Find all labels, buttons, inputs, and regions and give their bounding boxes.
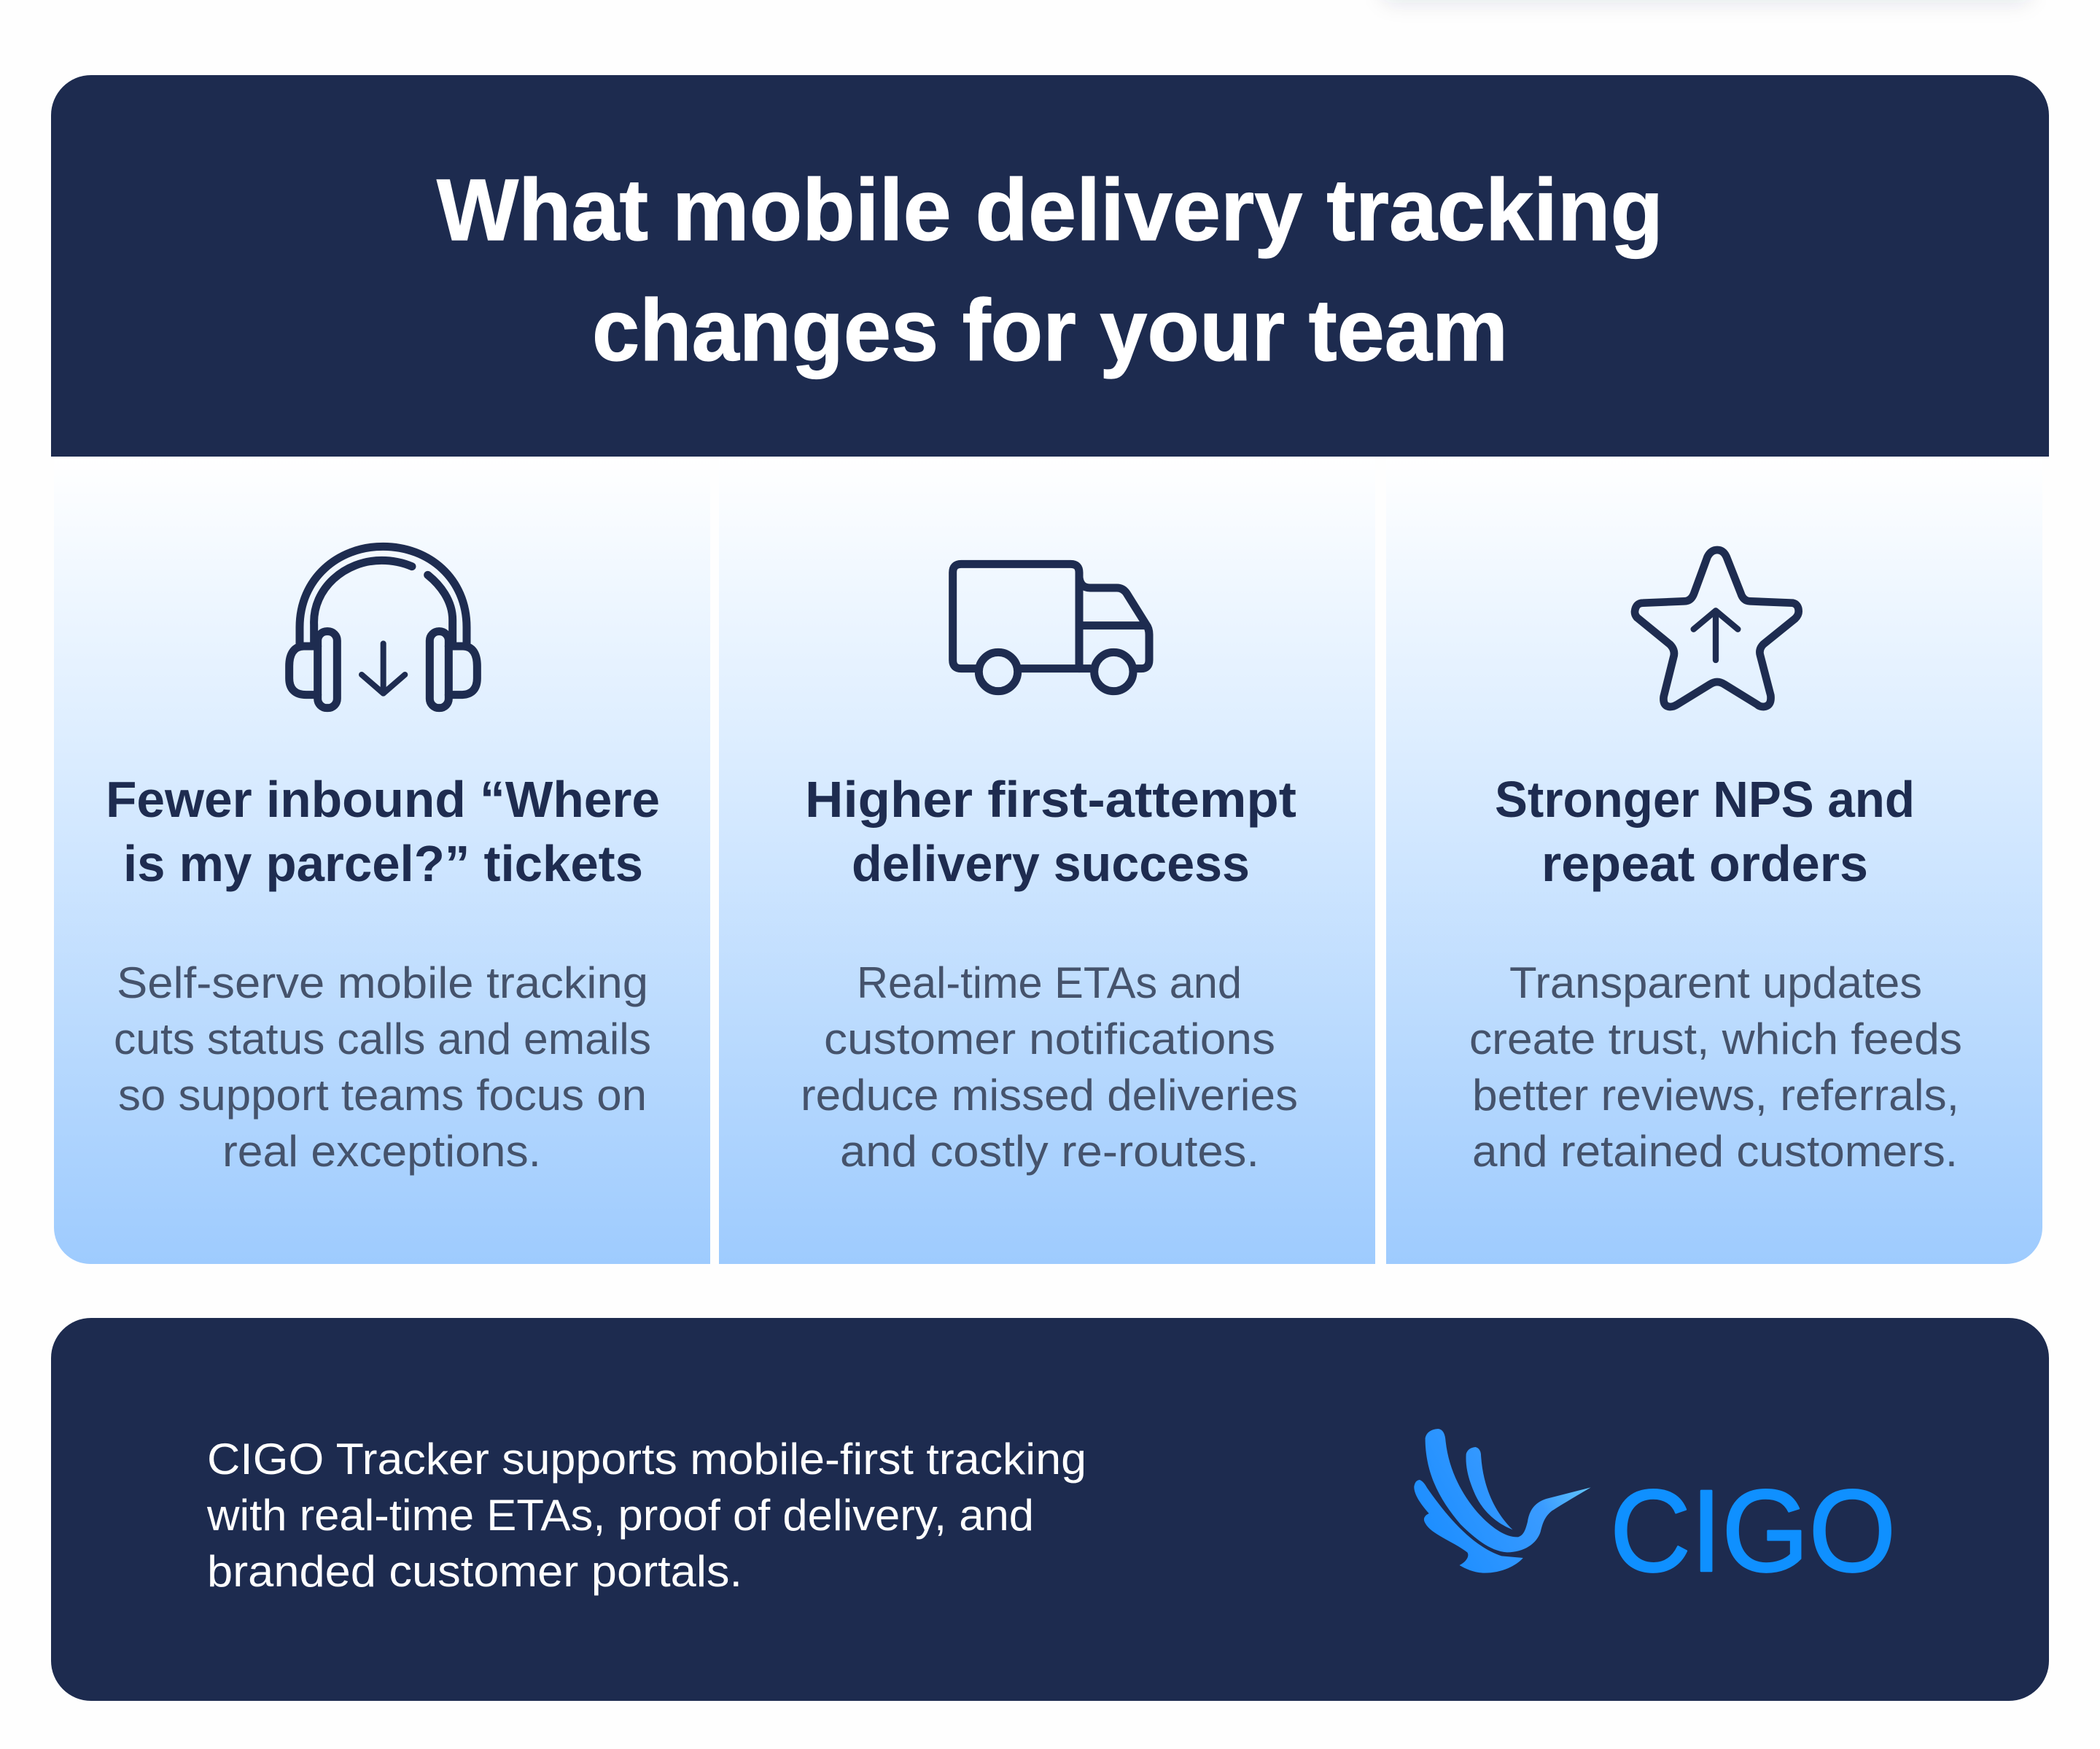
text block: and retained customers.	[1472, 1127, 1958, 1176]
heading: delivery success	[852, 835, 1250, 892]
heading: Fewer inbound “Where	[106, 771, 660, 828]
text block: customer notifications	[824, 1015, 1275, 1063]
panel: NPS and repeat orders	[1386, 457, 2042, 1264]
text block: cuts status calls and emails	[114, 1015, 651, 1063]
text block	[114, 958, 651, 1176]
text block	[801, 958, 1298, 1176]
text block: better reviews, referrals,	[1472, 1071, 1959, 1120]
text block: CIGO Tracker summary: with real-time ETAs, proof of delivery, and	[206, 1491, 1034, 1540]
heading: Higher first-attempt	[805, 771, 1296, 828]
text block: Transparent updates	[1509, 958, 1922, 1007]
top shadow of cropped element	[1382, 0, 2031, 3]
logo: CIGO	[1414, 1429, 1896, 1596]
text block: create trust, which feeds	[1469, 1015, 1962, 1063]
icon: star with up arrow	[1635, 550, 1799, 707]
title: What mobile delivery tracking	[437, 161, 1663, 259]
heading: repeat orders	[1541, 835, 1868, 892]
text block	[1469, 958, 1962, 1176]
panel: first-attempt delivery	[719, 457, 1375, 1264]
text block: CIGO Tracker summary	[206, 1435, 1086, 1596]
panel: fewer inbound tickets	[54, 457, 710, 1264]
heading: Stronger NPS and	[1495, 771, 1915, 828]
icon: headphones with down arrow	[289, 546, 477, 708]
text block: reduce missed deliveries	[801, 1071, 1298, 1120]
title	[437, 161, 1663, 379]
logo wordmark: CIGO	[1610, 1465, 1896, 1596]
text block: CIGO Tracker summary: branded customer portals.	[207, 1547, 742, 1596]
heading: is my parcel?” tickets	[123, 835, 643, 892]
icon: bird mark	[1414, 1429, 1591, 1573]
icon: delivery truck	[953, 564, 1149, 691]
heading	[1495, 771, 1915, 892]
panel: header	[51, 75, 2049, 457]
text block: CIGO Tracker summary: CIGO Tracker supports mobile-first tracking	[207, 1435, 1086, 1484]
panel: footer	[51, 1318, 2049, 1701]
text block: so support teams focus on	[118, 1071, 647, 1120]
text block: real exceptions.	[222, 1127, 541, 1176]
text block: Real-time ETAs and	[857, 958, 1242, 1007]
heading	[106, 771, 660, 892]
text block: Self-serve mobile tracking	[117, 958, 648, 1007]
heading	[805, 771, 1296, 892]
title: changes for your team	[592, 282, 1508, 379]
text block: and costly re-routes.	[840, 1127, 1259, 1176]
